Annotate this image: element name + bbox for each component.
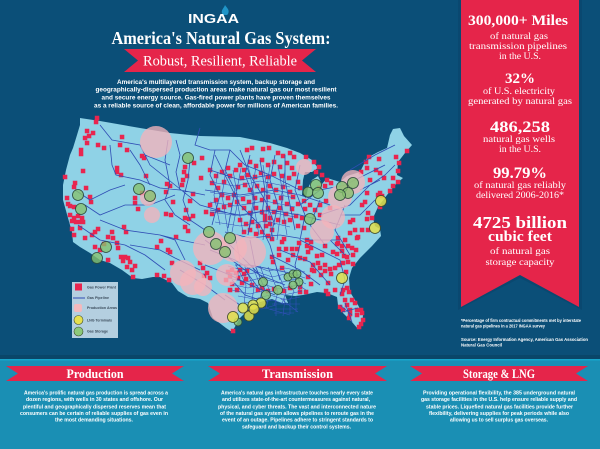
column: storage and LNG: [410, 366, 588, 424]
footnote: *Percentage of firm contractual commitments met by interstate: [461, 318, 582, 323]
column: production: consumers can be certain of reliable supplies of gas even in: [20, 411, 168, 417]
column: production: America's prolific natural gas production is spread across a: [24, 390, 169, 396]
stat: storage capacity: 4725 billion: [473, 213, 568, 232]
column: storage and LNG: flexibility, delivering supplies for peak periods while also: [429, 411, 569, 417]
legend: gas power plant: Gas Power Plant: [87, 286, 117, 290]
intro paragraph: America's multilayered transmission system, backup storage and: [117, 79, 315, 86]
stat: pipeline miles: transmission pipelines: [469, 42, 567, 52]
map: United States natural gas system: [63, 118, 412, 332]
column: transmission: and utilizes state-of-the-art countermeasures against natural,: [222, 397, 370, 403]
column: storage and LNG: stable prices. Liquefied natural gas facilities provide further: [426, 404, 574, 410]
production areas: [140, 126, 365, 323]
column: transmission: [208, 366, 387, 430]
stat: electricity share: 32%: [505, 71, 535, 87]
subtitle ribbon: Robust, Resilient, Reliable: [143, 54, 297, 70]
gas storage sites: [72, 152, 358, 326]
column: transmission: Transmission: [262, 367, 333, 381]
legend: gas storage: Gas Storage: [87, 330, 108, 334]
stat: storage capacity: [473, 213, 568, 268]
column: transmission: of the natural gas system allows pipelines to reroute gas in the: [220, 411, 375, 417]
stat: reliability: 99.79%: [493, 165, 547, 182]
panel: statistics banner: [458, 0, 582, 310]
stat: reliability: delivered 2006-2016*: [476, 191, 564, 201]
stat: pipeline miles: [468, 13, 568, 62]
logo: INGAA: INGAA: [188, 11, 240, 26]
sources: [461, 337, 588, 348]
legend: LNG terminals: LNG Terminals: [87, 318, 112, 322]
gas power plants: [65, 118, 407, 331]
stat: electricity share: [468, 71, 572, 107]
LNG terminals: [228, 196, 386, 322]
legend: gas pipeline: Gas Pipeline: [87, 296, 109, 300]
stat: wells: natural gas wells: [483, 135, 555, 145]
intro paragraph: [94, 79, 338, 110]
column: transmission: safeguard and backup their control systems.: [242, 424, 351, 430]
stat: storage capacity: cubic feet: [488, 229, 552, 245]
sources: Source: Energy Information Agency, American Gas Association: [461, 337, 588, 342]
stat: storage capacity: of natural gas: [490, 246, 550, 257]
column: transmission: America's natural gas infrastructure touches nearly every state: [221, 390, 374, 396]
legend: [72, 282, 118, 338]
stat: reliability: of natural gas reliably: [474, 180, 566, 191]
column: production: plentiful and geographically dispersed reserves mean that: [23, 404, 166, 410]
stat: reliability: [474, 165, 566, 201]
column: production: dozen regions, with wells in 30 states and offshore. Our: [26, 397, 164, 403]
sources: Natural Gas Council: [461, 342, 502, 348]
stat: storage capacity: storage capacity: [486, 258, 555, 268]
column: production: [6, 366, 184, 424]
legend: production areas: Production Areas: [87, 306, 117, 310]
intro paragraph: and secure energy source. Gas-fired power plants have proven themselves: [102, 94, 331, 102]
stat: pipeline miles: of natural gas: [490, 31, 548, 42]
stat: pipeline miles: in the U.S.: [499, 52, 541, 62]
stat: wells: in the U.S.: [499, 145, 541, 155]
column: transmission: physical, and cyber threats. The vast and interconnected nature: [218, 404, 377, 410]
stat: wells: [483, 119, 555, 155]
gas pipelines: [75, 125, 395, 322]
stat: wells: 486,258: [490, 119, 550, 136]
stat: pipeline miles: 300,000+ Miles: [468, 13, 568, 29]
panel: bottom section: [0, 355, 600, 449]
column: storage and LNG: Providing operational flexibility, the 385 underground natural: [423, 390, 575, 396]
intro paragraph: geographically-dispersed production areas make natural gas our most resilient: [96, 86, 337, 94]
dense pipeline network: [210, 165, 306, 316]
subtitle ribbon: [124, 49, 316, 72]
column: storage and LNG: gas storage facilities in the U.S. help ensure reliable supply and: [421, 397, 577, 403]
footnote: [461, 318, 582, 328]
footnote: natural gas pipelines in a 2017 INGAA survey: [461, 324, 546, 328]
land outline: [63, 118, 412, 332]
column: storage and LNG: Storage & LNG: [463, 367, 535, 381]
stat: electricity share: generated by natural gas: [468, 97, 572, 107]
title: America's Natural Gas System:: [112, 28, 330, 48]
stat: electricity share: of U.S. electricity: [483, 86, 555, 97]
column: production: Production: [66, 367, 124, 381]
column: production: the most demanding situations.: [55, 418, 133, 424]
logo: INGAA: [188, 5, 240, 26]
column: storage and LNG: allowing us to sell surplus gas overseas.: [450, 418, 548, 424]
column: transmission: event of an outage. Pipelines adhere to stringent standards to: [222, 418, 373, 424]
intro paragraph: as a reliable source of clean, affordable power for millions of American families.: [94, 102, 338, 110]
